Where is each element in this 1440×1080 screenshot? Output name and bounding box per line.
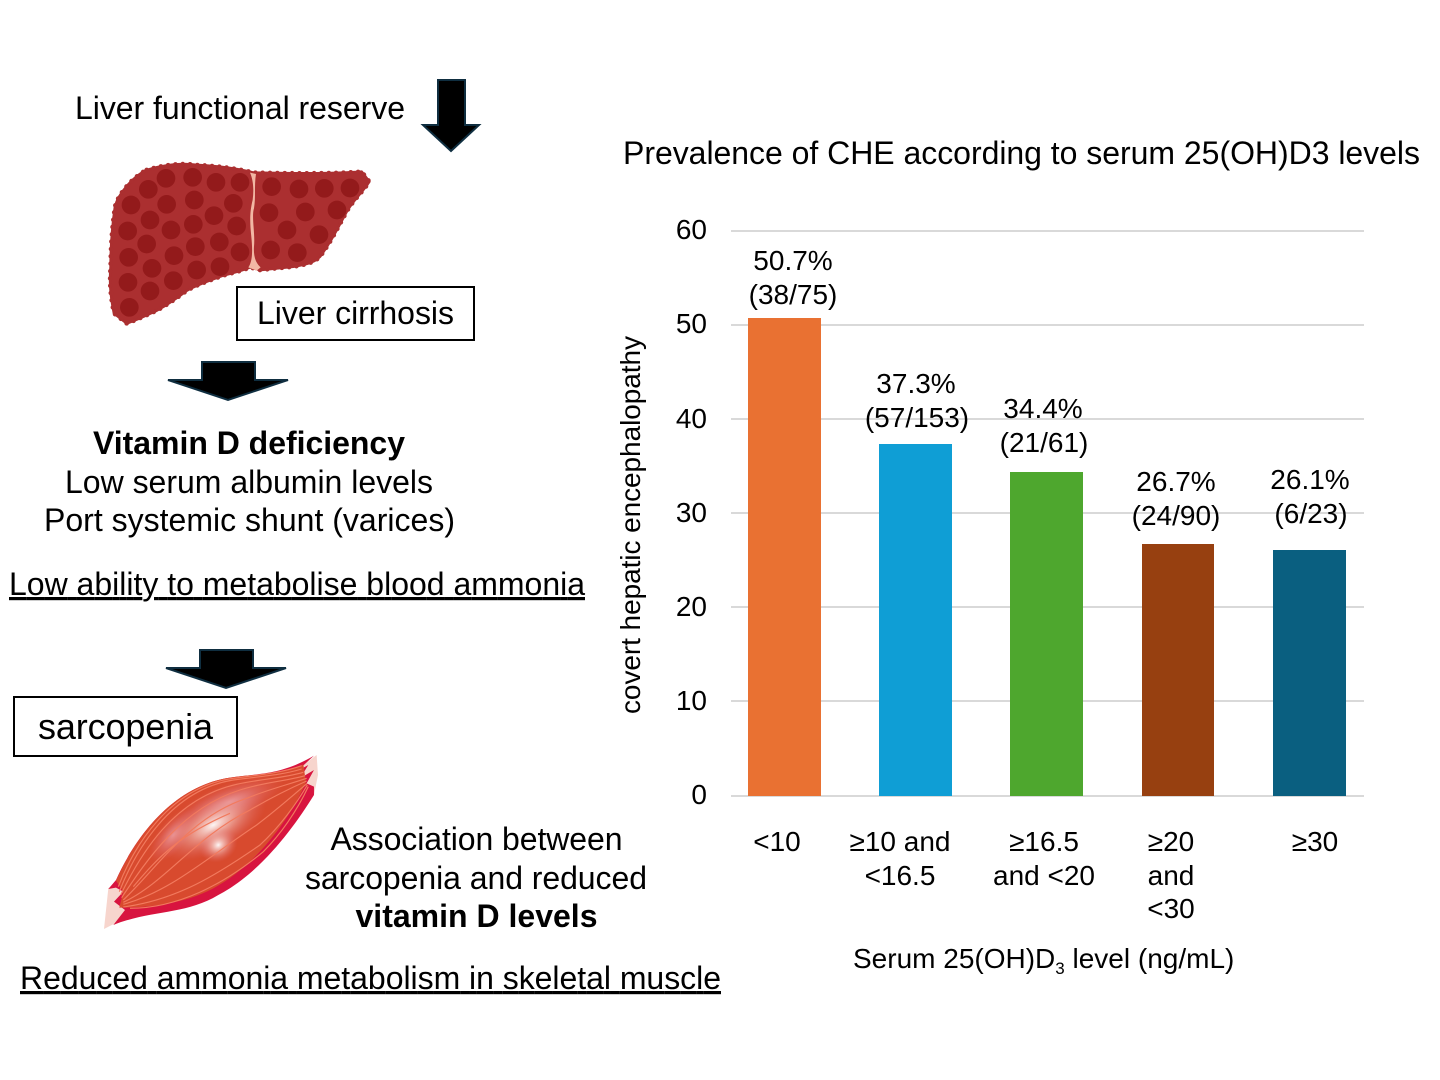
y axis labels: 20 (676, 591, 707, 622)
y axis labels: 10 (676, 685, 707, 716)
text block: contributing factors: Vitamin D deficiency (93, 425, 405, 461)
y axis labels: 60 (676, 214, 707, 245)
x axis category labels: <10 (753, 826, 801, 857)
label box: liver cirrhosis (237, 287, 474, 340)
text block: association (305, 821, 647, 934)
x axis category labels: ≥30 (1292, 826, 1338, 857)
icon: skeletal muscle (104, 755, 318, 929)
data labels: 50.7% (753, 245, 833, 276)
y axis labels: 0 (691, 779, 707, 810)
text block: contributing factors: Port systemic shunt (varices) (44, 502, 455, 538)
data labels: (57/153) (865, 402, 969, 433)
arrow: cirrhosis to vitamin D deficiency (168, 362, 288, 400)
label box: sarcopenia: sarcopenia (38, 706, 214, 747)
text block: contributing factors (44, 425, 455, 538)
data labels: (21/61) (1000, 427, 1088, 458)
heading: liver functional reserve: Liver functional reserve (75, 90, 405, 126)
x axis category labels: ≥16.5 (1009, 826, 1079, 857)
x axis category labels: and (1148, 860, 1194, 891)
x axis category labels: and <20 (993, 860, 1095, 891)
y axis labels: 50 (676, 308, 707, 339)
text block: association: vitamin D levels (356, 898, 598, 934)
text block: association: sarcopenia and reduced (305, 860, 647, 896)
data labels: 26.7% (1136, 466, 1216, 497)
data labels (749, 245, 1350, 531)
y axis labels: 40 (676, 403, 707, 434)
arrow: ammonia to sarcopenia (166, 650, 286, 688)
bars (748, 318, 1346, 796)
x axis category labels: ≥20 (1148, 826, 1194, 857)
chart title: Prevalence of CHE according to serum 25(OH)D3 levels (623, 135, 1420, 171)
x axis title: Serum 25(OH)D (853, 943, 1055, 974)
data labels: (6/23) (1274, 498, 1348, 529)
data labels: (38/75) (749, 279, 837, 310)
label box: liver cirrhosis: Liver cirrhosis (257, 295, 454, 331)
y axis labels: 30 (676, 497, 707, 528)
data labels: (24/90) (1132, 500, 1220, 531)
x axis category labels: <30 (1147, 893, 1195, 924)
data labels: 37.3% (876, 368, 956, 399)
text: reduced ammonia metabolism: Reduced ammonia metabolism in skeletal muscle (20, 960, 721, 996)
bar chart (615, 214, 1364, 978)
y axis gridlines (731, 231, 1364, 796)
text block: association: Association between (330, 821, 622, 857)
y axis title: covert hepatic encephalopathy (615, 336, 646, 714)
arrow: reserve declining (423, 80, 479, 151)
icon: cirrhotic liver (110, 164, 369, 323)
label box: sarcopenia (14, 697, 237, 756)
data labels: 34.4% (1003, 393, 1083, 424)
y axis labels (676, 214, 707, 810)
x axis title: 3 (1055, 959, 1065, 978)
text: low ability to metabolise blood ammonia: Low ability to metabolise blood ammonia (9, 566, 585, 602)
x axis category labels: <16.5 (865, 860, 935, 891)
x axis title: level (ng/mL) (1065, 943, 1234, 974)
x axis category labels (753, 826, 1338, 924)
text block: contributing factors: Low serum albumin levels (65, 464, 433, 500)
x axis category labels: ≥10 and (849, 826, 951, 857)
data labels: 26.1% (1270, 464, 1350, 495)
